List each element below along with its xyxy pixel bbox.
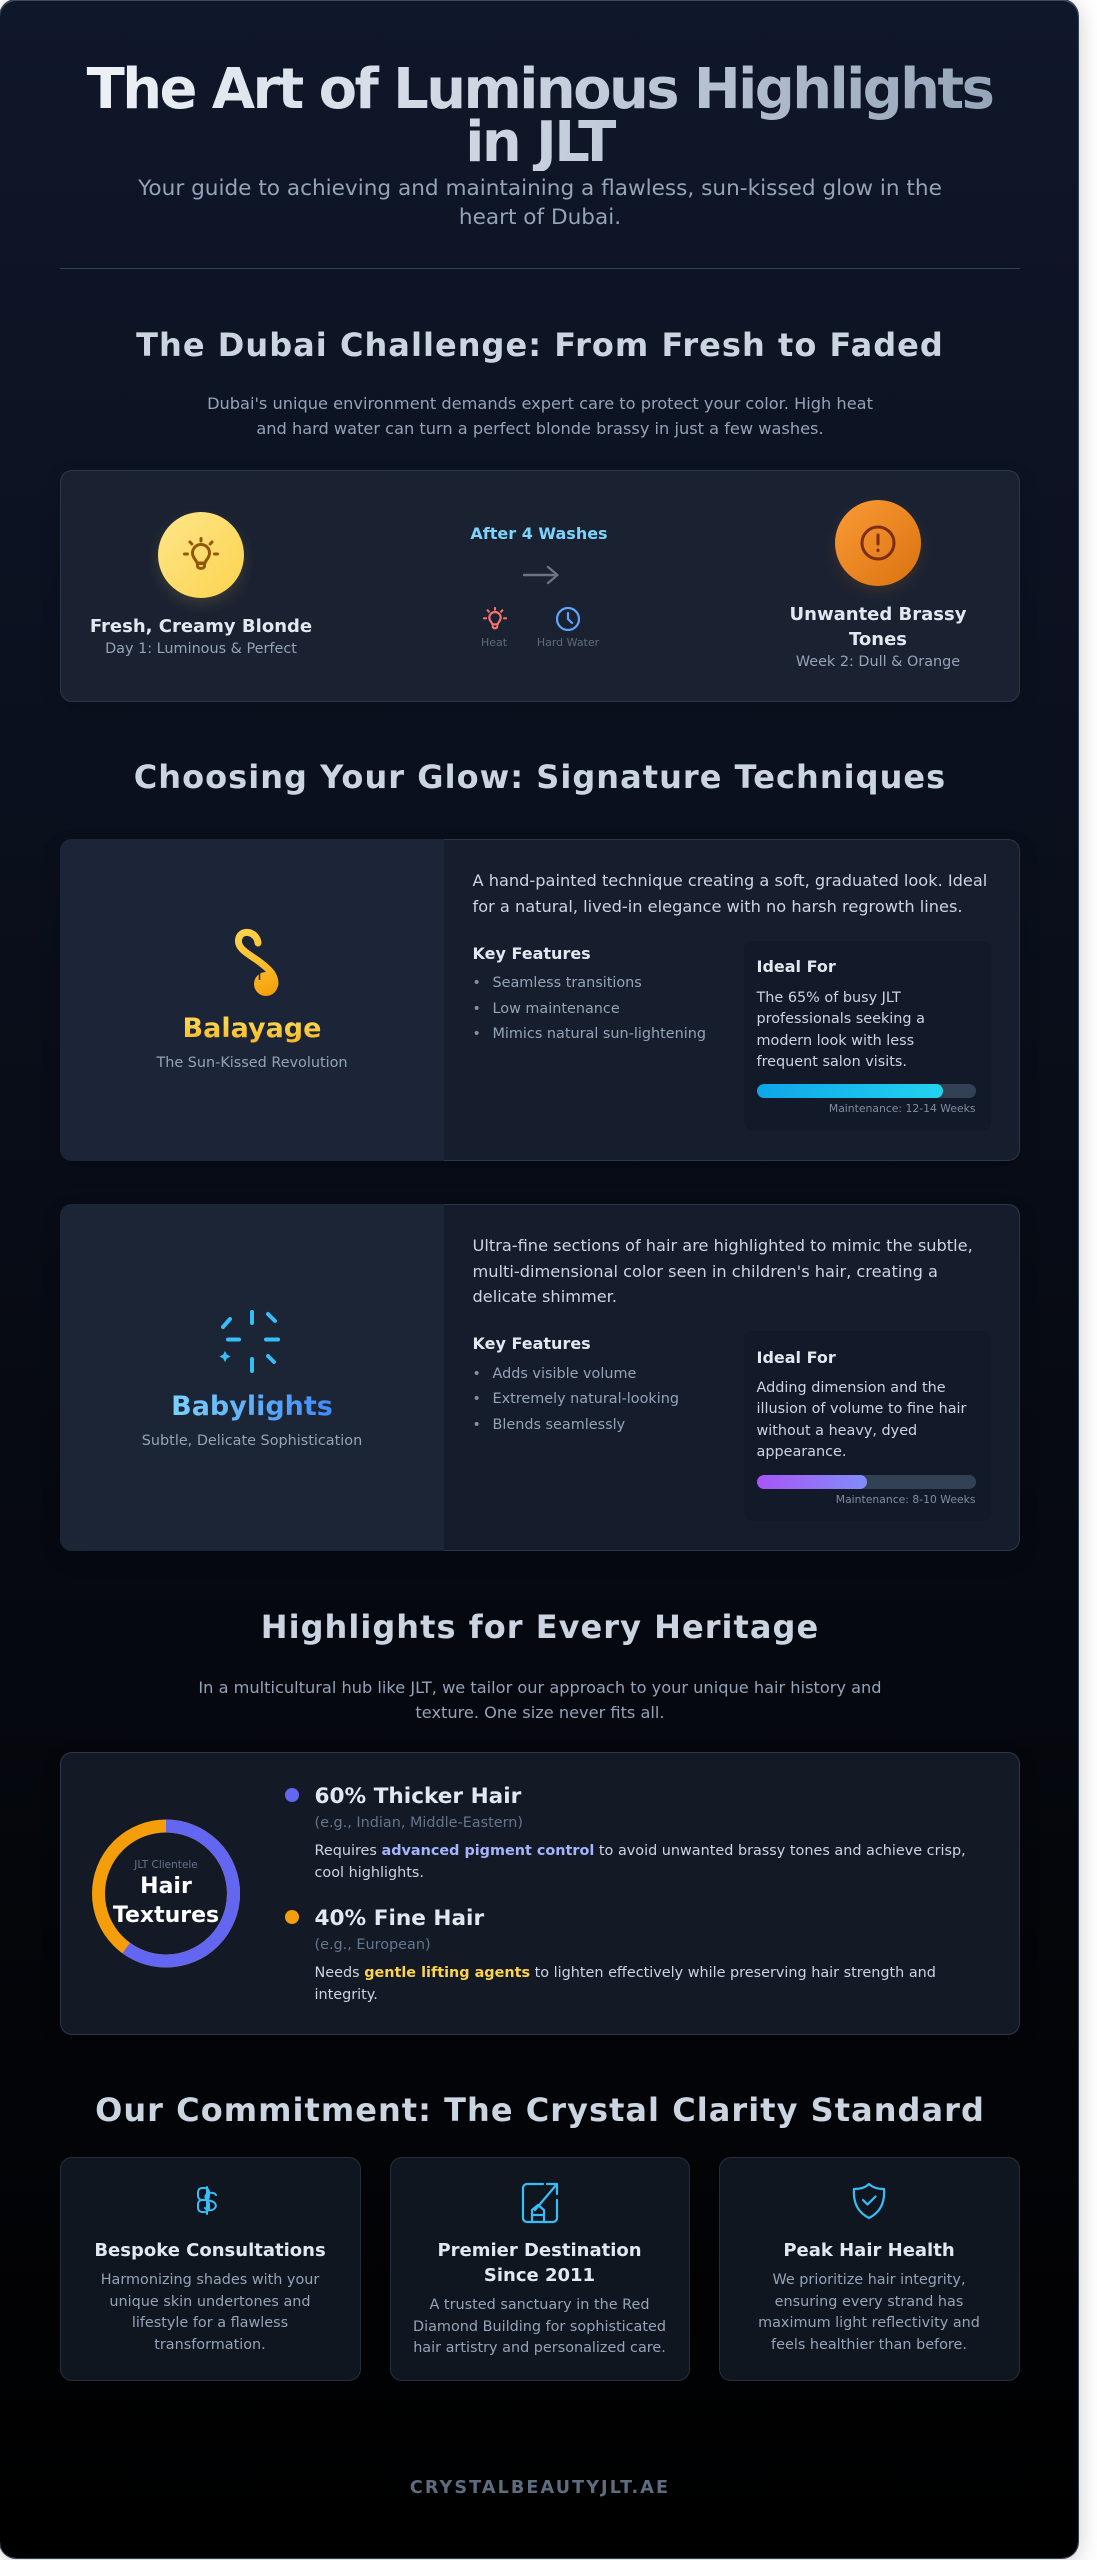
- text block: thicker hair: cool highlights.: [314, 1865, 424, 1881]
- text: ideal client: professionals seeking a: [756, 1011, 925, 1027]
- intro text: heritage: In a multicultural hub like JLT, we tailor our approach to your unique hair history and: [198, 1678, 882, 1697]
- label: brassy tones: Tones: [849, 629, 907, 650]
- list: babylights features: •: [472, 1416, 481, 1432]
- label: fresh blonde: Day 1: Luminous & Perfect: [105, 641, 297, 657]
- panel: premier destination: [390, 2157, 690, 2381]
- description: balayage: for a natural, lived-in elegance with no harsh regrowth lines.: [472, 896, 963, 916]
- list: balayage features: Low maintenance: [492, 1000, 620, 1016]
- description: babylights: multi-dimensional color seen in children's hair, creating a: [472, 1262, 938, 1280]
- footer website: CRYSTALBEAUTYJLT.AE: [410, 2478, 670, 2498]
- donut center label: Hair: [140, 1874, 192, 1899]
- panel: balayage: [60, 839, 1020, 1161]
- icon: orange alert circle: [835, 500, 921, 586]
- list: balayage features: [472, 975, 706, 1042]
- label: brassy tones: Week 2: Dull & Orange: [796, 654, 960, 670]
- panel: peak hair health: [718, 2157, 1020, 2381]
- card description: hair artistry and personalized care.: [413, 2340, 666, 2356]
- intro text: dubai challenge: [207, 394, 873, 438]
- icon: shield check: [852, 2183, 886, 2219]
- description: babylights: delicate shimmer.: [472, 1287, 617, 1306]
- tagline: balayage: The Sun-Kissed Revolution: [156, 1054, 348, 1070]
- text: ideal client: [756, 1380, 966, 1460]
- babylights identity panel: [60, 1204, 444, 1551]
- card description: ensuring every strand has: [775, 2294, 963, 2310]
- label: heat: Heat: [481, 636, 507, 649]
- label: maintenance 12-14 weeks: Maintenance: 12-14 Weeks: [829, 1102, 976, 1115]
- subtitle: [138, 176, 942, 230]
- heading: our commitment: Our Commitment: The Crystal Clarity Standard: [95, 2091, 985, 2129]
- icon: hard water clock: [556, 607, 580, 631]
- card description: [413, 2297, 666, 2356]
- text block: fine hair: [314, 1906, 936, 2003]
- icon: babylights sparkle: [220, 1310, 280, 1373]
- technique name: balayage: Balayage: [183, 1013, 321, 1044]
- list: balayage features: Seamless transitions: [492, 975, 642, 991]
- subtitle: heart of Dubai.: [459, 205, 621, 230]
- card title: Peak Hair Health: [783, 2240, 955, 2261]
- card description: maximum light reflectivity and: [758, 2315, 980, 2331]
- list: babylights features: Extremely natural-looking: [492, 1391, 679, 1407]
- technique name: balayage: [152, 1011, 352, 1047]
- text block: fine hair: (e.g., European): [314, 1937, 431, 1953]
- icon: yellow bulb circle: [158, 512, 244, 598]
- heading: key features: Key Features: [472, 1334, 591, 1352]
- balayage identity panel: [60, 839, 444, 1161]
- label: after 4 washes: After 4 Washes: [470, 524, 608, 543]
- heading: key features: Key Features: [472, 944, 591, 962]
- text: ideal client: Adding dimension and the: [756, 1380, 946, 1396]
- card description: [758, 2272, 980, 2353]
- text: ideal client: The 65% of busy JLT: [756, 990, 901, 1006]
- panel: challenge comparison: [60, 470, 1020, 702]
- text: ideal client: appearance.: [756, 1444, 846, 1460]
- heading: the dubai challenge: The Dubai Challenge: From Fresh to Faded: [136, 326, 944, 364]
- text block: thicker hair: 60% Thicker Hair: [314, 1784, 521, 1809]
- donut center label: Textures: [113, 1903, 219, 1928]
- icon: heat: [483, 607, 507, 630]
- text: ideal client: modern look with less: [756, 1033, 914, 1049]
- heading: choosing your glow: Choosing Your Glow: Signature Techniques: [134, 758, 946, 796]
- heading: ideal for: Ideal For: [756, 1348, 836, 1367]
- title: [84, 63, 995, 171]
- label: fresh blonde: Fresh, Creamy Blonde: [90, 616, 312, 637]
- card description: Diamond Building for sophisticated: [413, 2319, 666, 2335]
- text: ideal client: illusion of volume to fine hair: [756, 1401, 966, 1417]
- description: balayage: [472, 871, 987, 916]
- card title: Premier Destination: [437, 2240, 642, 2261]
- intro text: dubai challenge: Dubai's unique environment demands expert care to protect your color. High heat: [207, 394, 873, 413]
- card description: We prioritize hair integrity,: [772, 2272, 966, 2288]
- card description: A trusted sanctuary in the Red: [430, 2297, 649, 2313]
- intro text: heritage: [198, 1678, 882, 1722]
- description: balayage: A hand-painted technique creating a soft, graduated look. Ideal: [472, 871, 987, 890]
- label: brassy tones: Unwanted Brassy: [790, 604, 966, 625]
- tagline: babylights: Subtle, Delicate Sophistication: [142, 1432, 362, 1448]
- card title: Since 2011: [484, 2265, 595, 2286]
- text block: fine hair: integrity.: [314, 1987, 378, 2003]
- technique name: babylights: [112, 1389, 392, 1425]
- card description: unique skin undertones and: [109, 2294, 311, 2310]
- text: ideal client: frequent salon visits.: [756, 1054, 907, 1070]
- label: hard water: Hard Water: [537, 636, 599, 649]
- legend dot: thicker hair: [285, 1788, 299, 1802]
- description: babylights: [472, 1236, 973, 1306]
- title: The Art of Luminous Highlights: [87, 57, 992, 122]
- list: babylights features: Blends seamlessly: [492, 1416, 625, 1432]
- arrow: fresh to faded: [522, 566, 559, 584]
- intro text: dubai challenge: and hard water can turn a perfect blonde brassy in just a few washes.: [256, 419, 824, 438]
- panel: bespoke consultations: [60, 2157, 360, 2381]
- maintenance bar 12-14 weeks: [756, 1084, 976, 1098]
- donut center label: [112, 1859, 219, 1928]
- icon: balayage s-stroke: [234, 928, 278, 996]
- text block: fine hair: Needs gentle lifting agents to lighten effectively while preserving hair strength and: [314, 1965, 936, 1981]
- panel: ideal for balayage: [744, 941, 990, 1130]
- card description: Harmonizing shades with your: [101, 2272, 319, 2288]
- label: fresh blonde: [90, 616, 312, 657]
- maintenance bar 8-10 weeks: [756, 1475, 976, 1489]
- card description: [101, 2272, 320, 2353]
- panel: babylights: [60, 1204, 1020, 1551]
- intro text: heritage: texture. One size never fits all.: [415, 1703, 665, 1722]
- list: balayage features: •: [472, 975, 481, 991]
- list: balayage features: •: [472, 1026, 481, 1042]
- description: babylights: Ultra-fine sections of hair are highlighted to mimic the subtle,: [472, 1236, 973, 1255]
- icon: building with arrow: [522, 2182, 558, 2224]
- list: babylights features: •: [472, 1366, 481, 1382]
- heading: ideal for: Ideal For: [756, 957, 836, 976]
- list: balayage features: •: [472, 1000, 481, 1016]
- technique name: babylights: Babylights: [171, 1391, 333, 1422]
- text block: thicker hair: [314, 1784, 966, 1881]
- list: babylights features: Adds visible volume: [492, 1366, 636, 1382]
- label: brassy tones: [790, 604, 966, 670]
- label: maintenance 8-10 weeks: Maintenance: 8-10 Weeks: [836, 1493, 976, 1506]
- list: babylights features: •: [472, 1391, 481, 1407]
- card title: [437, 2240, 642, 2286]
- panel: hair textures: [60, 1752, 1020, 2035]
- donut center label: JLT Clientele: [134, 1859, 198, 1871]
- donut chart: 60 percent thicker, 40 percent fine: [92, 1820, 240, 1968]
- text block: fine hair: 40% Fine Hair: [314, 1906, 484, 1931]
- text block: thicker hair: (e.g., Indian, Middle-Eastern): [314, 1815, 523, 1831]
- card description: transformation.: [154, 2337, 266, 2353]
- text block: thicker hair: Requires advanced pigment control to avoid unwanted brassy tones and achieve crisp,: [314, 1843, 966, 1859]
- panel: ideal for babylights: [744, 1331, 990, 1521]
- card title: Bespoke Consultations: [94, 2240, 326, 2261]
- card description: feels healthier than before.: [771, 2337, 967, 2353]
- text: ideal client: [756, 990, 925, 1070]
- list: balayage features: Mimics natural sun-lightening: [492, 1026, 706, 1042]
- subtitle: Your guide to achieving and maintaining a flawless, sun-kissed glow in the: [138, 176, 942, 200]
- text: ideal client: without a heavy, dyed: [756, 1423, 917, 1439]
- list: babylights features: [472, 1366, 679, 1432]
- card description: lifestyle for a flawless: [132, 2315, 288, 2331]
- heading: highlights for every heritage: Highlights for Every Heritage: [261, 1608, 819, 1646]
- legend dot: fine hair: [285, 1910, 299, 1924]
- title: in JLT: [465, 110, 614, 175]
- icon: bespoke dollar mark: [197, 2186, 217, 2215]
